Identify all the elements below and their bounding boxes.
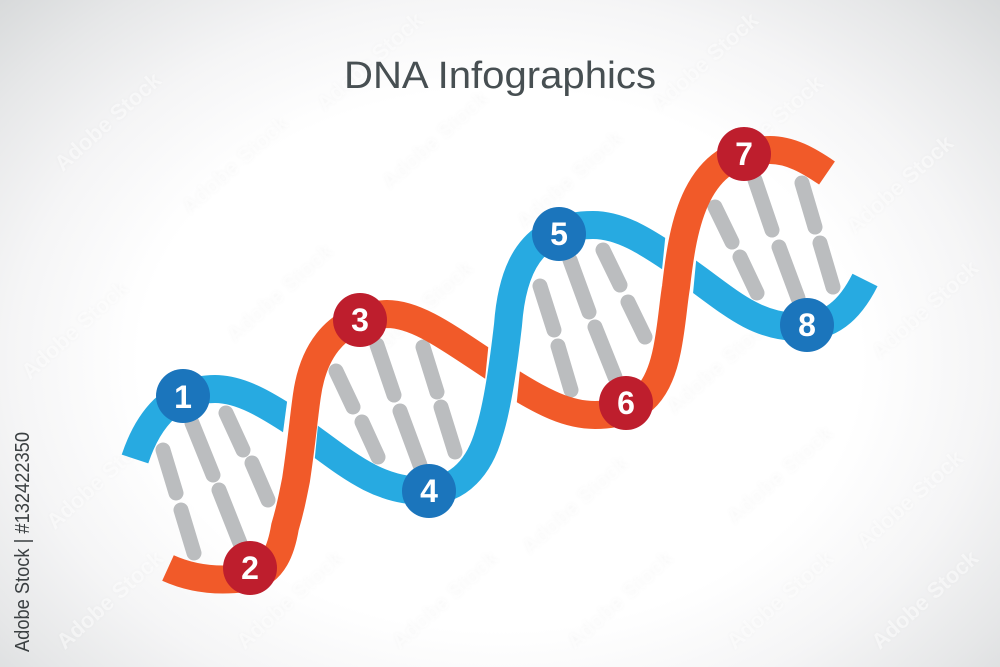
- node 6: 6: [617, 385, 635, 421]
- node 7: 7: [735, 136, 753, 172]
- watermark pattern: Adobe Stock: [516, 450, 633, 559]
- watermark pattern: Adobe Stock: [49, 67, 166, 176]
- node 2: 2: [241, 550, 259, 586]
- watermark pattern: Adobe Stock: [841, 130, 958, 239]
- watermark pattern: Adobe Stock: [511, 125, 628, 234]
- watermark pattern: Adobe Stock: [231, 545, 348, 654]
- watermark pattern: Adobe Stock: [361, 255, 478, 364]
- node 7: [717, 127, 771, 181]
- node 6: [599, 376, 653, 430]
- node 1: 1: [174, 379, 192, 415]
- watermark pattern: Adobe Stock: [51, 545, 168, 654]
- watermark pattern: Adobe Stock: [376, 85, 493, 194]
- watermark pattern: Adobe Stock: [646, 7, 763, 116]
- node 5: [532, 207, 586, 261]
- watermark pattern: Adobe Stock: [711, 70, 828, 179]
- node 1: [156, 369, 210, 423]
- DNA base pair rungs: [163, 180, 833, 553]
- watermark pattern: Adobe Stock: [176, 110, 293, 219]
- orange strand: [168, 150, 827, 580]
- node 5: 5: [550, 216, 568, 252]
- watermark pattern: Adobe Stock: [386, 545, 503, 654]
- watermark pattern: Adobe Stock: [311, 7, 428, 116]
- node 3: [333, 293, 387, 347]
- node 8: 8: [798, 307, 816, 343]
- watermark pattern: Adobe Stock: [661, 310, 778, 419]
- node 2: [223, 541, 277, 595]
- node 4: [402, 464, 456, 518]
- title: DNA Infographics: [344, 55, 656, 97]
- node 3: 3: [351, 302, 369, 338]
- watermark pattern: Adobe Stock: [561, 545, 678, 654]
- node 8: [780, 298, 834, 352]
- blue strand: [135, 225, 865, 491]
- watermark pattern: Adobe Stock: [851, 445, 968, 554]
- watermark pattern: Adobe Stock: [866, 255, 983, 364]
- node 4: 4: [420, 473, 438, 509]
- stock id caption: Adobe Stock | #132422350: [12, 432, 34, 652]
- watermark pattern: Adobe Stock: [16, 275, 133, 384]
- watermark pattern: Adobe Stock: [41, 425, 158, 534]
- watermark pattern: Adobe Stock: [721, 420, 838, 529]
- watermark pattern: Adobe Stock: [721, 545, 838, 654]
- watermark pattern: Adobe Stock: [221, 238, 338, 347]
- watermark pattern: Adobe Stock: [866, 545, 983, 654]
